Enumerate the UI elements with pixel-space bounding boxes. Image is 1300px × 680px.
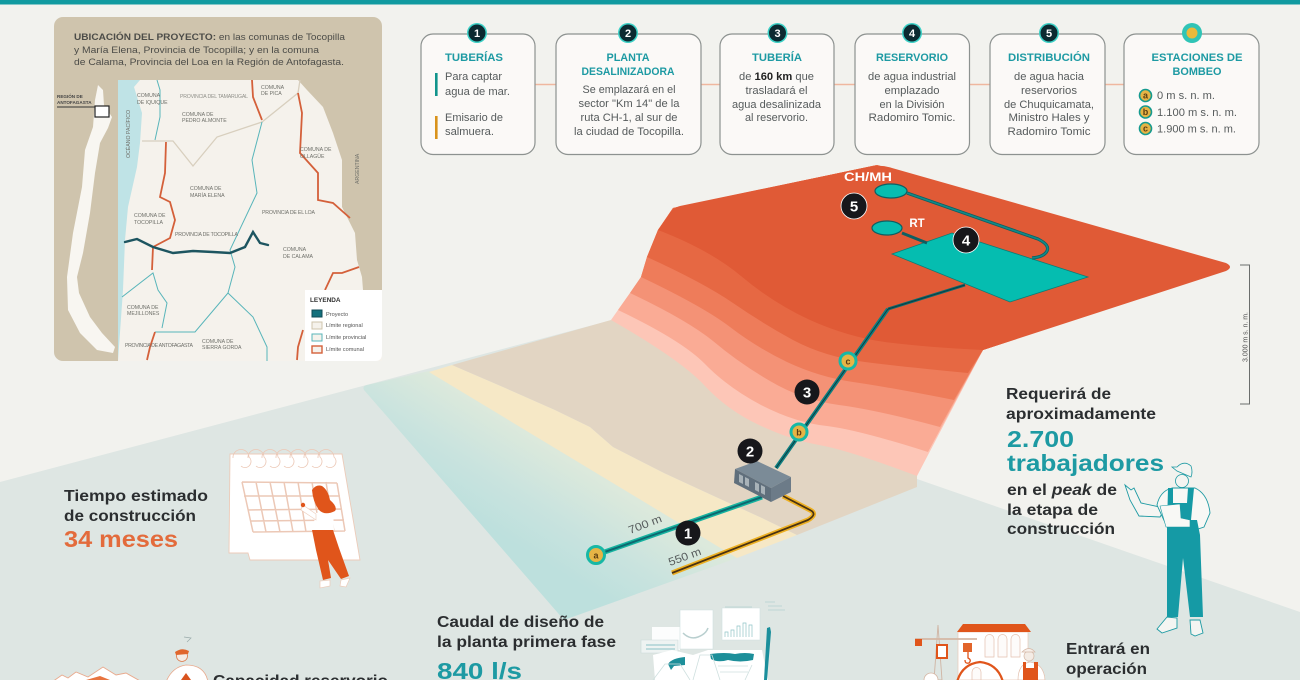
- workers text: en el peak de: [1007, 482, 1117, 499]
- map legend: Límite comunal: [326, 347, 364, 353]
- icon: plant documents: [641, 602, 785, 680]
- badge 2: [738, 438, 762, 464]
- construction time text: Tiempo estimado: [64, 488, 208, 505]
- pumping station c: c: [845, 356, 851, 366]
- regional map: COMUNA: [137, 93, 161, 99]
- Chile silhouette: [57, 85, 115, 353]
- workers text: aproximadamente: [1006, 406, 1156, 423]
- icon: mountains and person: [52, 637, 208, 680]
- desert plain: [452, 320, 917, 535]
- distance labels: 700 m: [627, 513, 664, 537]
- badge 3: 3: [803, 384, 811, 402]
- regional map: PEDRO ALMONTE: [182, 118, 227, 124]
- operation start text: operación: [1066, 661, 1147, 678]
- workers text: la etapa de: [1007, 502, 1098, 519]
- panel: planta desalinizadora: la ciudad de Tocopilla.: [574, 126, 684, 138]
- panel: planta desalinizadora: DESALINIZADORA: [582, 66, 675, 78]
- panel: reservorio: 4: [909, 28, 916, 40]
- panel: reservorio: Radomiro Tomic.: [868, 112, 956, 124]
- workers text: trabajadores: [1007, 450, 1164, 476]
- panel: estaciones de bombeo: 1.900 m s. n. m.: [1157, 124, 1236, 136]
- pumping station a: [588, 546, 604, 564]
- regional map: MARÍA ELENA: [190, 192, 225, 199]
- terrain: mountain contour bands: [611, 165, 1230, 476]
- panel: tubería: al reservorio.: [745, 112, 808, 124]
- panel: tuberías: salmuera.: [445, 126, 494, 138]
- brine outfall pipe: [672, 496, 814, 573]
- construction time text: de construcción: [64, 508, 196, 525]
- panel: reservorio: RESERVORIO: [876, 52, 948, 64]
- map legend: Límite regional: [326, 323, 363, 329]
- badge 4: 4: [962, 232, 971, 250]
- panel: reservorio: [855, 23, 970, 154]
- regional map: COMUNA DE: [182, 112, 214, 118]
- map legend: Límite provincial: [326, 335, 366, 341]
- card connectors: [535, 84, 1124, 86]
- distance labels: [627, 513, 703, 569]
- pumping station c: [840, 353, 856, 369]
- beach sand strip: [429, 365, 797, 558]
- tank labels: CH/MH: [844, 172, 892, 184]
- panel: estaciones de bombeo: [1124, 23, 1259, 154]
- panel: distribución: Ministro Hales y: [1008, 112, 1090, 124]
- icon: building under construction: [915, 624, 1045, 680]
- workers text: 2.700: [1007, 426, 1074, 452]
- panel: tuberías: TUBERÍAS: [445, 51, 503, 64]
- pumping station b: b: [796, 428, 802, 438]
- regional map: COMUNA: [261, 85, 285, 91]
- tank labels: RT: [909, 218, 925, 230]
- workers text: [1006, 386, 1164, 538]
- flow rate text: Caudal de diseño de: [437, 614, 604, 631]
- regional map: PROVINCIA DE TOCOPILLA: [175, 232, 239, 238]
- operation start text: [1066, 641, 1150, 678]
- panel: reservorio: de agua industrial: [868, 71, 956, 83]
- location description text: y María Elena, Provincia de Tocopilla; y en la comuna: [74, 45, 320, 56]
- map legend: LEYENDA: [310, 297, 341, 304]
- tank labels: [844, 172, 925, 230]
- regional map: COMUNA: [283, 247, 307, 253]
- panel: planta desalinizadora: ruta CH-1, al sur de: [580, 112, 678, 124]
- panel: distribución: reservorios: [1021, 85, 1077, 97]
- badge 1: 1: [684, 526, 692, 542]
- sea: [363, 371, 737, 620]
- icon: calendar and woman: [229, 449, 360, 588]
- regional map: OCÉANO PACÍFICO: [125, 110, 132, 158]
- panel: estaciones de bombeo: 0 m s. n. m.: [1157, 90, 1215, 102]
- Chile silhouette: REGIÓN DE: [57, 92, 83, 99]
- panel: tuberías: [421, 23, 535, 154]
- panel: planta desalinizadora: Se emplazará en el: [582, 84, 676, 96]
- regional map: COMUNA DE: [300, 147, 332, 153]
- badge 5: [841, 193, 867, 219]
- map legend: Proyecto: [326, 312, 348, 318]
- panel: planta desalinizadora: PLANTA: [606, 52, 650, 64]
- regional map: DE CALAMA: [283, 254, 314, 260]
- regional map: TOCOPILLA: [134, 220, 164, 226]
- panel: tubería: de 160 km que: [739, 71, 814, 83]
- panel: distribución: Radomiro Tomic: [1008, 126, 1091, 138]
- regional map: [118, 80, 382, 361]
- operation start text: Entrará en: [1066, 641, 1150, 658]
- panel: estaciones de bombeo: a: [1143, 90, 1149, 100]
- altitude scale bar: 3.000 m s. n. m.: [1242, 312, 1250, 362]
- pumping station b: [791, 424, 807, 440]
- panel: reservorio: emplazado: [884, 85, 940, 97]
- construction time text: 34 meses: [64, 526, 178, 552]
- regional map: PROVINCIA DEL TAMARUGAL: [180, 94, 248, 100]
- distance labels: 550 m: [667, 546, 703, 569]
- badge 3: [794, 380, 820, 404]
- panel: planta desalinizadora: [556, 23, 701, 154]
- location description text: [74, 31, 346, 68]
- regional map: DE IQUIQUE: [137, 100, 168, 106]
- panel: estaciones de bombeo: BOMBEO: [1172, 66, 1222, 78]
- panel: distribución: de agua hacia: [1014, 71, 1085, 83]
- regional map: COMUNA DE: [190, 186, 222, 192]
- panel: estaciones de bombeo: c: [1143, 124, 1148, 134]
- icon: worker: [1125, 463, 1210, 636]
- panel: tubería: [720, 23, 834, 154]
- location description text: de Calama, Provincia del Loa en la Región de Antofagasta.: [74, 57, 344, 68]
- regional map: COMUNA DE: [202, 339, 234, 345]
- panel: estaciones de bombeo: ESTACIONES DE: [1152, 52, 1242, 64]
- badge 1: [676, 520, 700, 546]
- map legend: [305, 290, 382, 361]
- panel: tubería: agua desalinizada: [732, 99, 822, 111]
- panel: distribución: 5: [1046, 28, 1052, 40]
- construction time text: [64, 488, 208, 552]
- top teal bar: [0, 0, 1300, 4]
- badge 5: 5: [850, 198, 858, 216]
- panel: distribución: [990, 23, 1105, 154]
- panel: estaciones de bombeo: 1.100 m s. n. m.: [1157, 107, 1237, 119]
- regional map: DE PICA: [261, 91, 282, 97]
- panel: estaciones de bombeo: b: [1143, 107, 1149, 117]
- panel: planta desalinizadora: sector "Km 14" de la: [578, 98, 680, 110]
- regional map: MEJILLONES: [127, 311, 160, 317]
- regional map: PROVINCIA DE ANTOFAGASTA: [125, 343, 194, 349]
- workers text: construcción: [1007, 521, 1115, 538]
- panel: distribución: DISTRIBUCIÓN: [1008, 51, 1090, 64]
- regional map: ARGENTINA: [355, 153, 361, 184]
- reservoir: [892, 233, 1088, 302]
- flow rate text: [437, 614, 616, 680]
- panel: tubería: TUBERÍA: [752, 51, 802, 64]
- desalination plant building: [734, 461, 791, 502]
- seawater intake pipe: [596, 497, 762, 555]
- altitude scale bar: [1240, 265, 1250, 404]
- badge 4: [953, 227, 979, 253]
- panel: distribución: de Chuquicamata,: [1004, 99, 1094, 111]
- regional map: OLLAGÜE: [300, 153, 325, 160]
- panel: project location map: [54, 17, 382, 361]
- regional map: COMUNA DE: [127, 305, 159, 311]
- panel: tuberías: 1: [474, 28, 480, 40]
- regional map: PROVINCIA DE EL LOA: [262, 210, 316, 216]
- panel: planta desalinizadora: 2: [625, 28, 631, 40]
- workers text: Requerirá de: [1006, 386, 1111, 403]
- panel: tubería: trasladará el: [746, 85, 808, 97]
- distribution pipes and tanks: [872, 184, 1048, 258]
- regional map: SIERRA GORDA: [202, 345, 242, 351]
- panel: tuberías: Emisario de: [445, 112, 503, 124]
- regional map: COMUNA DE: [134, 213, 166, 219]
- location description text: UBICACIÓN DEL PROYECTO: en las comunas de Tocopilla: [74, 31, 346, 43]
- badge 2: 2: [746, 444, 754, 460]
- panel: reservorio: en la División: [880, 99, 944, 111]
- main pipeline: [776, 285, 965, 468]
- panel: tuberías: Para captar: [445, 71, 502, 83]
- Chile silhouette: ANTOFAGASTA: [57, 100, 92, 105]
- pumping station a: a: [593, 550, 599, 560]
- flow rate text: la planta primera fase: [437, 634, 616, 651]
- panel: tubería: 3: [774, 28, 781, 40]
- panel: tuberías: agua de mar.: [445, 86, 510, 98]
